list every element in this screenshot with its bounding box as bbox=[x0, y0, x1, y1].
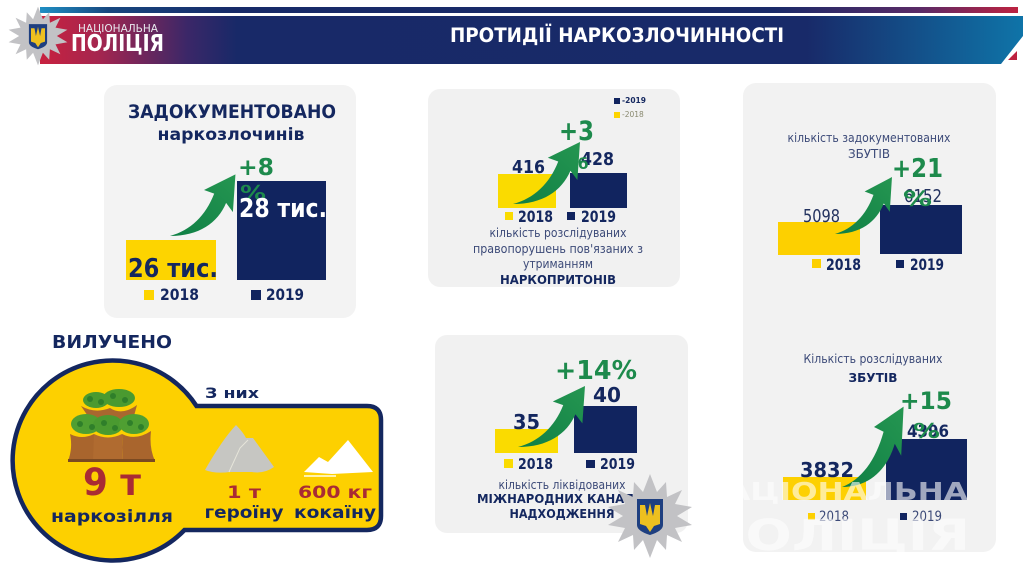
description: ЗБУТІВ bbox=[848, 146, 890, 161]
description bbox=[477, 477, 647, 521]
description: правопорушень пов'язаних з bbox=[473, 241, 643, 256]
icon: sacks of cannabis bbox=[68, 389, 155, 462]
legend: 2019 bbox=[581, 207, 616, 226]
description: МІЖНАРОДНИХ КАНАЛІВ bbox=[477, 491, 647, 506]
value: 9 t: 9 т bbox=[83, 461, 142, 504]
value 2019: 428 bbox=[581, 149, 614, 170]
police logo text: НАЦІОНАЛЬНА bbox=[78, 22, 158, 35]
watermark bbox=[700, 477, 970, 561]
bar 2019 bbox=[237, 181, 326, 280]
main band bbox=[40, 16, 1023, 64]
panel: documented drug crimes bbox=[104, 85, 356, 318]
corner accent bbox=[1008, 51, 1017, 60]
panel: international channels bbox=[435, 335, 688, 533]
bar 2018 bbox=[495, 429, 558, 453]
description: Кількість розслідуваних bbox=[804, 351, 942, 366]
value 2018: 26 тис. bbox=[128, 254, 218, 284]
description: ЗБУТІВ bbox=[848, 370, 898, 385]
upper leaves bbox=[83, 392, 109, 408]
legend: 2018 bbox=[826, 255, 861, 274]
growth arrow bbox=[518, 386, 585, 447]
description: НАРКОПРИТОНІВ bbox=[500, 272, 616, 287]
bar 2019 bbox=[880, 205, 962, 254]
chart: documented sales: % bbox=[903, 187, 932, 211]
value 2018: 5098 bbox=[803, 207, 840, 227]
panel: documented drug crimes: % bbox=[240, 181, 266, 205]
title: ПРОТИДІЇ НАРКОЗЛОЧИННОСТІ bbox=[450, 23, 784, 47]
legend bbox=[808, 509, 942, 525]
description: утриманням bbox=[523, 256, 593, 271]
legend: 2018 bbox=[819, 509, 849, 525]
description bbox=[804, 351, 942, 385]
top stripe bbox=[40, 7, 1018, 13]
top legend: -2019 bbox=[622, 96, 646, 105]
chart: investigated sales: % bbox=[913, 419, 940, 443]
legend: 2018 bbox=[518, 207, 553, 226]
bar 2018 bbox=[498, 174, 556, 208]
growth arrow bbox=[170, 174, 235, 236]
top legend bbox=[614, 96, 646, 119]
description bbox=[788, 130, 950, 161]
top legend: -2018 bbox=[622, 110, 644, 119]
description: кількість ліквідованих bbox=[498, 477, 626, 492]
growth arrow bbox=[842, 407, 904, 487]
icon: cocaine pile bbox=[304, 440, 373, 477]
growth value: +3 bbox=[559, 116, 594, 147]
legend bbox=[504, 455, 635, 473]
legend: 2019 bbox=[910, 255, 944, 274]
description: НАДХОДЖЕННЯ bbox=[510, 506, 614, 521]
growth arrow bbox=[513, 142, 580, 204]
growth value: +8 bbox=[238, 155, 274, 181]
bar 2018 bbox=[778, 222, 860, 255]
value 2019: 28 тис. bbox=[239, 194, 327, 224]
value: 600 kg cocaine: 600 кг bbox=[298, 483, 372, 503]
legend: 2019 bbox=[600, 455, 635, 473]
panel: drug dens: б bbox=[578, 155, 588, 173]
value: 1 t heroin bbox=[204, 483, 284, 523]
chart: investigated sales bbox=[783, 351, 967, 525]
value 2018: 416 bbox=[512, 157, 545, 178]
legend: 2018 bbox=[518, 455, 553, 473]
legend: 2019 bbox=[266, 285, 304, 304]
panel: drug dens bbox=[428, 89, 680, 287]
growth value: +15 bbox=[900, 387, 952, 415]
icon: police star badge bbox=[608, 474, 692, 558]
value 2019: 40 bbox=[593, 383, 621, 407]
description: кількість задокументованих bbox=[788, 130, 950, 145]
panel heading bbox=[128, 101, 336, 145]
legend bbox=[144, 285, 304, 304]
bar 2019 bbox=[574, 406, 637, 453]
label: drugs: наркозілля bbox=[51, 507, 173, 527]
description bbox=[473, 225, 643, 287]
watermark: НАЦІОНАЛЬНА bbox=[700, 477, 969, 506]
icon: heroin pile bbox=[205, 425, 274, 473]
legend: 2018 bbox=[160, 285, 199, 304]
seized drugs shape bbox=[13, 360, 381, 560]
icon: police star header bbox=[9, 7, 67, 65]
bar 2019 bbox=[886, 439, 967, 500]
panel heading: наркозлочинів bbox=[158, 125, 305, 145]
label: of which: З них bbox=[205, 386, 259, 402]
chart: documented sales bbox=[778, 130, 962, 274]
value: 1 t heroin: героїну bbox=[204, 503, 284, 523]
legend bbox=[812, 255, 944, 274]
heading: seized: ВИЛУЧЕНО bbox=[52, 332, 172, 353]
bar 2018 bbox=[783, 477, 866, 500]
lower leaves bbox=[71, 414, 101, 434]
value 2018: 3832 bbox=[800, 458, 854, 482]
police logo text bbox=[71, 22, 164, 57]
header banner bbox=[40, 7, 1023, 64]
legend bbox=[505, 207, 616, 226]
value: 1 t heroin: 1 т bbox=[227, 483, 261, 503]
panel: drug sales bbox=[743, 83, 996, 552]
lower sacks bbox=[68, 434, 94, 461]
value 2018: 35 bbox=[513, 410, 540, 434]
value: 600 kg cocaine bbox=[294, 483, 376, 523]
legend: 2019 bbox=[912, 509, 942, 525]
watermark: ПОЛІЦІЯ bbox=[700, 511, 970, 561]
growth arrow bbox=[835, 177, 892, 234]
description: кількість розслідуваних bbox=[490, 225, 626, 240]
value 2019: 4396 bbox=[907, 422, 949, 442]
value: 600 kg cocaine: кокаїну bbox=[294, 503, 376, 523]
growth value: +14% bbox=[555, 356, 637, 386]
police logo text: ПОЛІЦІЯ bbox=[71, 31, 164, 57]
panel heading: ЗАДОКУМЕНТОВАНО bbox=[128, 101, 336, 123]
bar 2018 bbox=[126, 240, 216, 280]
upper sacks bbox=[81, 405, 137, 422]
value 2019: 6152 bbox=[904, 187, 942, 207]
bar 2019 bbox=[570, 173, 627, 208]
growth value: +21 bbox=[892, 154, 943, 184]
